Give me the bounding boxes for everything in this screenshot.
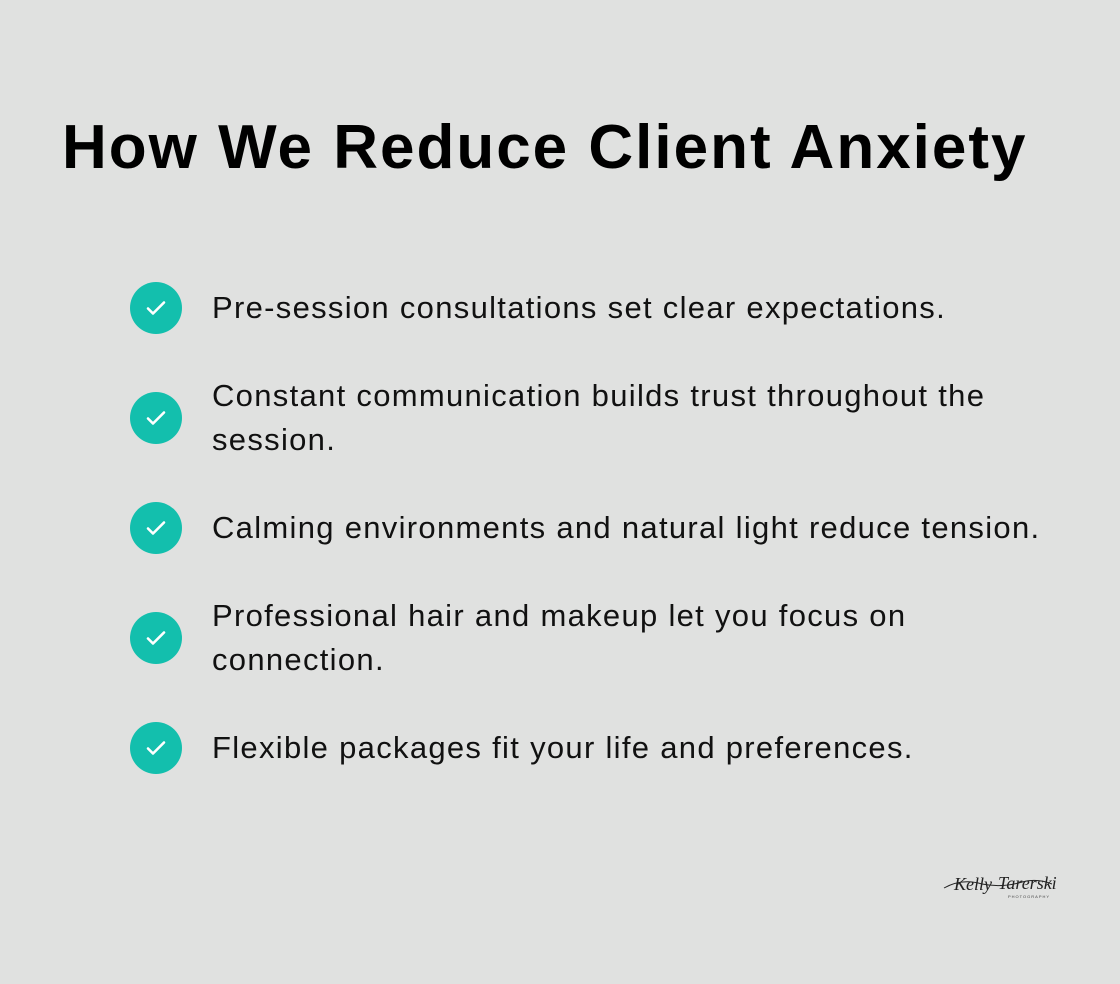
item 4 [130,598,906,677]
text 1: Pre-session consultations set clear expectations. [212,290,946,325]
logo signature: Tarerski [998,873,1057,893]
logo signature: PHOTOGRAPHY [1008,894,1050,899]
item 1 [130,282,946,334]
icon: check 4 [130,612,182,664]
icon: check 3 [130,502,182,554]
text 5: Flexible packages fit your life and preferences. [212,730,914,765]
icon: check 2 [130,392,182,444]
text 4: connection. [212,642,385,677]
text 2: Constant communication builds trust throughout the [212,378,985,413]
text 4 [212,598,906,677]
logo signature [944,873,1057,899]
item 3 [130,502,1040,554]
item 5 [130,722,914,774]
text 2 [212,378,985,457]
title: How We Reduce Client Anxiety [62,113,1028,182]
logo signature: Kelly [953,874,992,894]
icon: check 1 [130,282,182,334]
text 4: Professional hair and makeup let you focus on [212,598,906,633]
item 2 [130,378,985,457]
text 3: Calming environments and natural light reduce tension. [212,510,1040,545]
icon: check 5 [130,722,182,774]
text 2: session. [212,422,336,457]
